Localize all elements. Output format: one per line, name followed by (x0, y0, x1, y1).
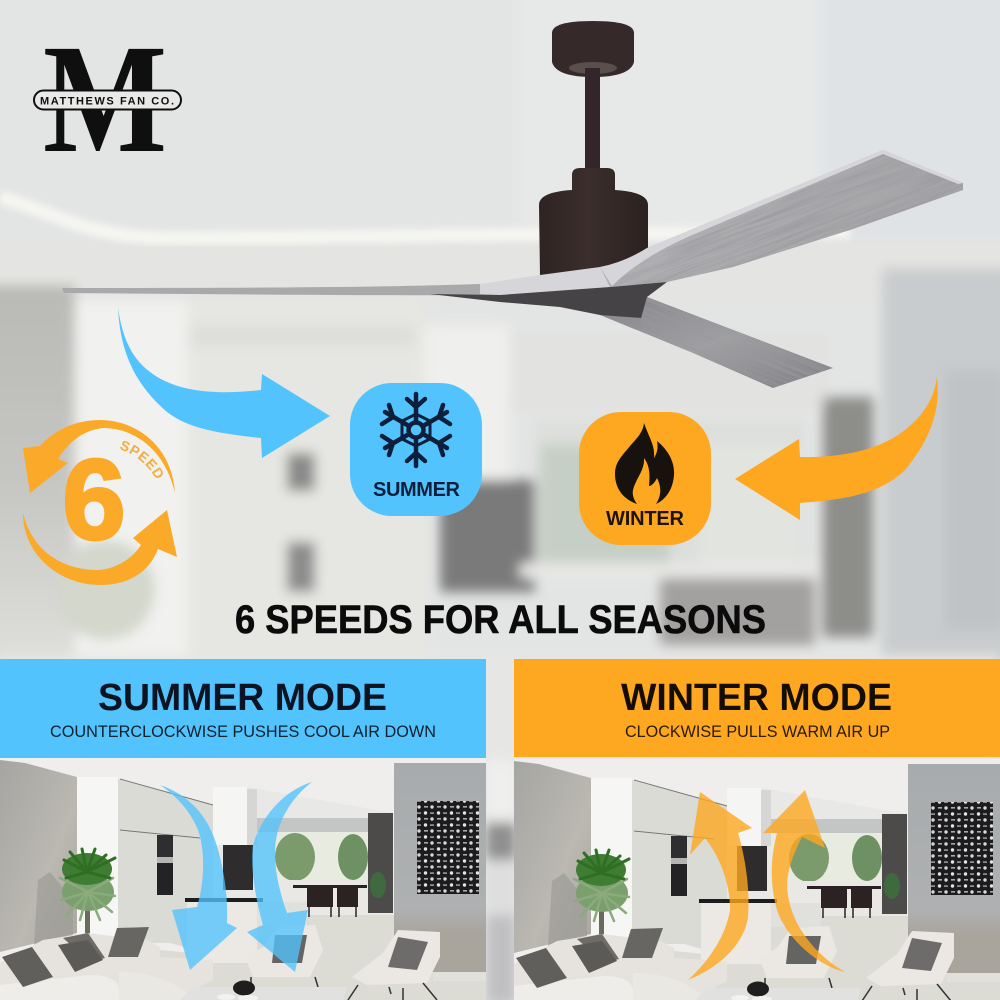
blue arrow: to summer (118, 308, 330, 458)
dining set (293, 885, 367, 917)
right up arrow (763, 790, 845, 972)
white column (77, 777, 118, 942)
wall oven (157, 835, 173, 895)
panel: summer mode header: SUMMER MODE (98, 677, 387, 719)
upper right blade (600, 150, 963, 287)
panel: summer mode header: COUNTERCLOCKWISE PUSHES COOL AIR DOWN (50, 722, 436, 741)
armchair (245, 925, 323, 987)
left wall (0, 760, 77, 952)
winter air flow arrows (688, 790, 845, 980)
armchair (348, 930, 440, 1000)
numeral 6: 6 (62, 437, 126, 564)
sofa cushions (2, 927, 149, 987)
panel: winter mode header: WINTER MODE (621, 677, 892, 719)
logo: Matthews Fan Co.: M (43, 12, 167, 185)
curtain (368, 813, 393, 913)
panel: winter mode header (514, 659, 1000, 757)
hood column (213, 787, 247, 845)
panel: summer room photo (0, 758, 486, 1000)
panel: winter mode header: CLOCKWISE PULLS WARM AIR UP (625, 722, 890, 741)
icon: snowflake (382, 394, 450, 466)
fan motor housing (539, 168, 648, 276)
ceiling fan (62, 21, 963, 388)
upper blade light edge (600, 150, 963, 286)
summer air flow arrows (160, 782, 312, 972)
sofa (0, 933, 213, 1000)
winter badge (579, 412, 711, 545)
speed label on arc (119, 449, 164, 515)
right down arrow (247, 782, 312, 972)
fan downrod (585, 68, 600, 172)
blade hub underside (430, 282, 667, 318)
summer badge: SUMMER (373, 479, 461, 501)
kitchen cabinets (118, 779, 213, 955)
6 speed icon (23, 420, 177, 585)
right wall (394, 763, 486, 972)
upper blade wood grain (619, 155, 939, 284)
canopy underside ring (569, 62, 617, 74)
winter badge: WINTER (606, 508, 685, 530)
left down arrow (160, 785, 237, 970)
main heading: 6 SPEEDS FOR ALL SEASONS (235, 598, 766, 642)
lower right blade (600, 297, 833, 388)
wall art (417, 801, 479, 894)
icon: flame (615, 423, 674, 504)
blade root light section (480, 267, 612, 295)
left up arrow (688, 792, 752, 980)
bottom circular arrow (23, 510, 177, 585)
coffee table with teapot (180, 980, 347, 1000)
long left blade (62, 283, 500, 295)
fan canopy (552, 21, 634, 77)
potted plant (60, 849, 115, 935)
top circular arrow (23, 420, 175, 493)
plant shadow (34, 872, 73, 945)
floor (160, 915, 486, 1000)
logo: Matthews Fan Co.: MATTHEWS FAN CO. (40, 96, 174, 108)
summer badge (350, 383, 482, 516)
orange arrow: to winter (735, 377, 938, 520)
rear room and windows (213, 787, 393, 915)
6 speed icon: SPEED (120, 441, 163, 478)
panel: winter room photo (514, 759, 1000, 1000)
panel: summer mode header (0, 659, 486, 758)
kitchen island (185, 898, 307, 963)
lower blade wood grain (646, 299, 824, 378)
